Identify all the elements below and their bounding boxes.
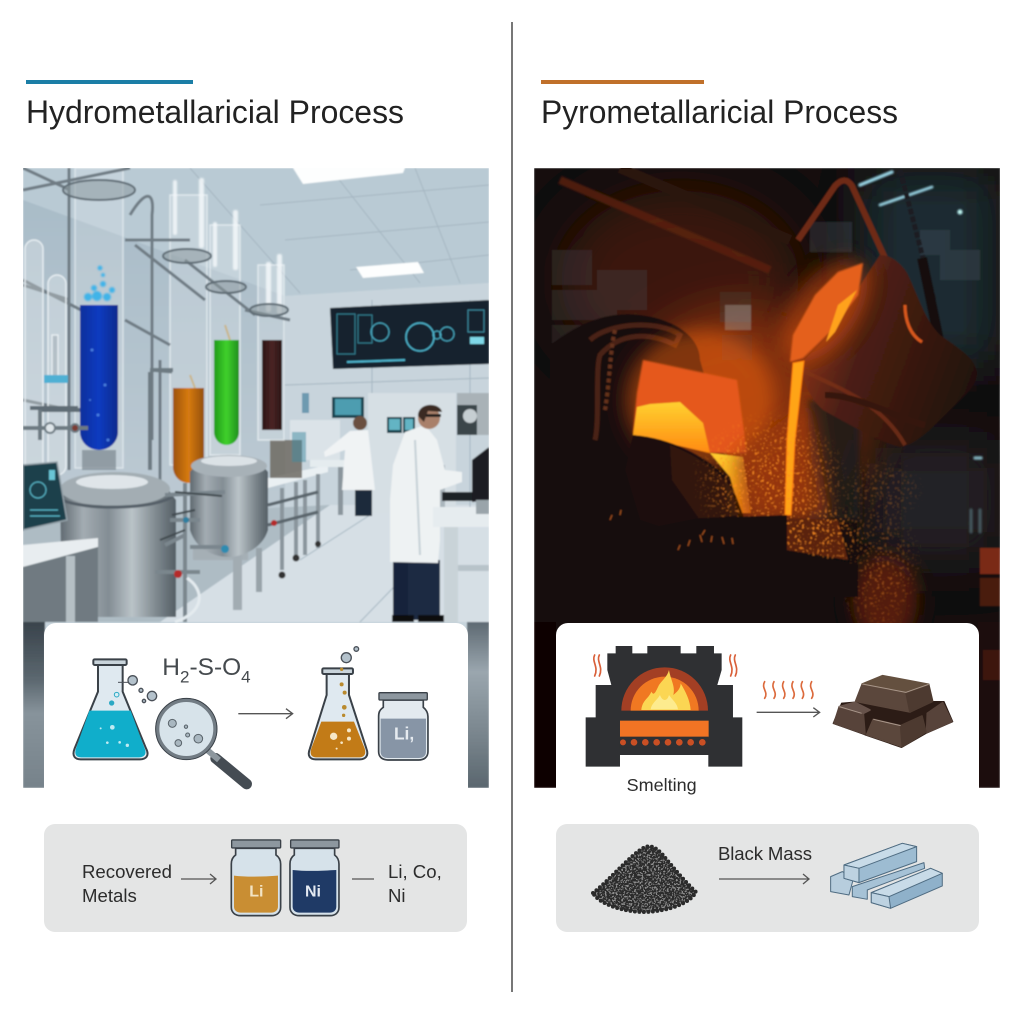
grey card: recovered metals (44, 824, 467, 932)
icon: flask with amber solution (309, 647, 367, 759)
coloured solutions (80, 266, 282, 483)
label: smelting: Smelting (627, 775, 697, 795)
glow below base (853, 555, 917, 645)
back wall cabinet and small monitors (290, 393, 489, 513)
overhead lights (860, 172, 981, 532)
arrow (719, 874, 809, 884)
icon: flask with cyan solution (73, 659, 157, 759)
sparks (694, 416, 922, 623)
furnace body (549, 314, 732, 526)
furnace base (608, 508, 1000, 608)
haze under the pour (735, 400, 830, 520)
arrow (181, 874, 216, 884)
tables along the back (267, 431, 344, 580)
strips beside the overlaid card (23, 622, 45, 788)
grey card: black mass (556, 824, 979, 932)
ceiling lights (293, 168, 424, 278)
label: black mass: Black Mass (718, 843, 812, 864)
icon: heat waves (764, 682, 813, 698)
formula: sulfuric acid: -S-O (189, 654, 241, 681)
wall display screen (330, 300, 489, 369)
furnace mouth glow (625, 330, 775, 540)
label: recovered metals: Recovered (82, 861, 172, 882)
monitor and desk at left (23, 462, 98, 622)
ladle (802, 255, 977, 447)
icon: lithium jar (231, 840, 281, 916)
scientist in background (324, 416, 375, 516)
icon group: smelting diagram (586, 646, 953, 795)
scientist in foreground (390, 405, 462, 622)
ladle hanger arm (798, 180, 885, 258)
photo: molten metal pour (534, 168, 1000, 788)
icon: smelting furnace (586, 646, 742, 767)
formula: sulfuric acid: 2 (180, 667, 189, 686)
heading: hydrometallurgical: Hydrometallaricial Process (26, 94, 404, 130)
icon: grey lithium jar: Li, (394, 723, 414, 743)
arrow (238, 709, 293, 719)
white icon card: leaching steps (44, 623, 468, 800)
strips beside the overlaid card (534, 622, 1000, 788)
icon: grey lithium jar (379, 693, 428, 760)
pipework between tanks (155, 483, 277, 622)
connector line (352, 878, 374, 880)
glass reactor columns (23, 168, 290, 480)
formula: sulfuric acid: 4 (241, 667, 251, 686)
white icon card: smelting steps (556, 623, 979, 800)
icon: refined metal bars (831, 843, 942, 908)
panel: hydrometallurgical process (23, 80, 489, 932)
valves on the left (23, 370, 173, 470)
icon: magnifying glass (156, 698, 247, 784)
formula: sulfuric acid: H (162, 654, 180, 681)
left wall glassware (25, 240, 85, 480)
icon: lithium jar: Li (249, 884, 264, 901)
photo: laboratory with glass reactors (23, 168, 489, 788)
accent rule: orange (541, 80, 704, 84)
label: recovered metals: Metals (82, 885, 137, 906)
icon group: chemical leaching diagram (73, 647, 428, 784)
arrow (757, 708, 820, 717)
heading: pyrometallurgical: Pyrometallaricial Process (541, 94, 898, 130)
molten stream (785, 361, 804, 515)
workbench at right (440, 446, 489, 622)
molten spill from ladle (766, 244, 884, 376)
icon: black mass pile (593, 846, 696, 912)
slag block beside base (787, 518, 848, 560)
icon: nickel jar: Ni (305, 884, 321, 901)
panel: pyrometallurgical process (534, 80, 1000, 932)
divider between the two processes (511, 22, 513, 992)
hanging chain (902, 186, 935, 300)
background windows and beams (552, 168, 980, 520)
icon: dark metal ingots (833, 676, 953, 747)
stainless tanks (60, 450, 268, 617)
label: recovered elements: Ni (388, 885, 406, 906)
accent rule: blue (26, 80, 193, 84)
icon: nickel jar (290, 840, 339, 916)
label: recovered elements: Li, Co, (388, 861, 442, 882)
